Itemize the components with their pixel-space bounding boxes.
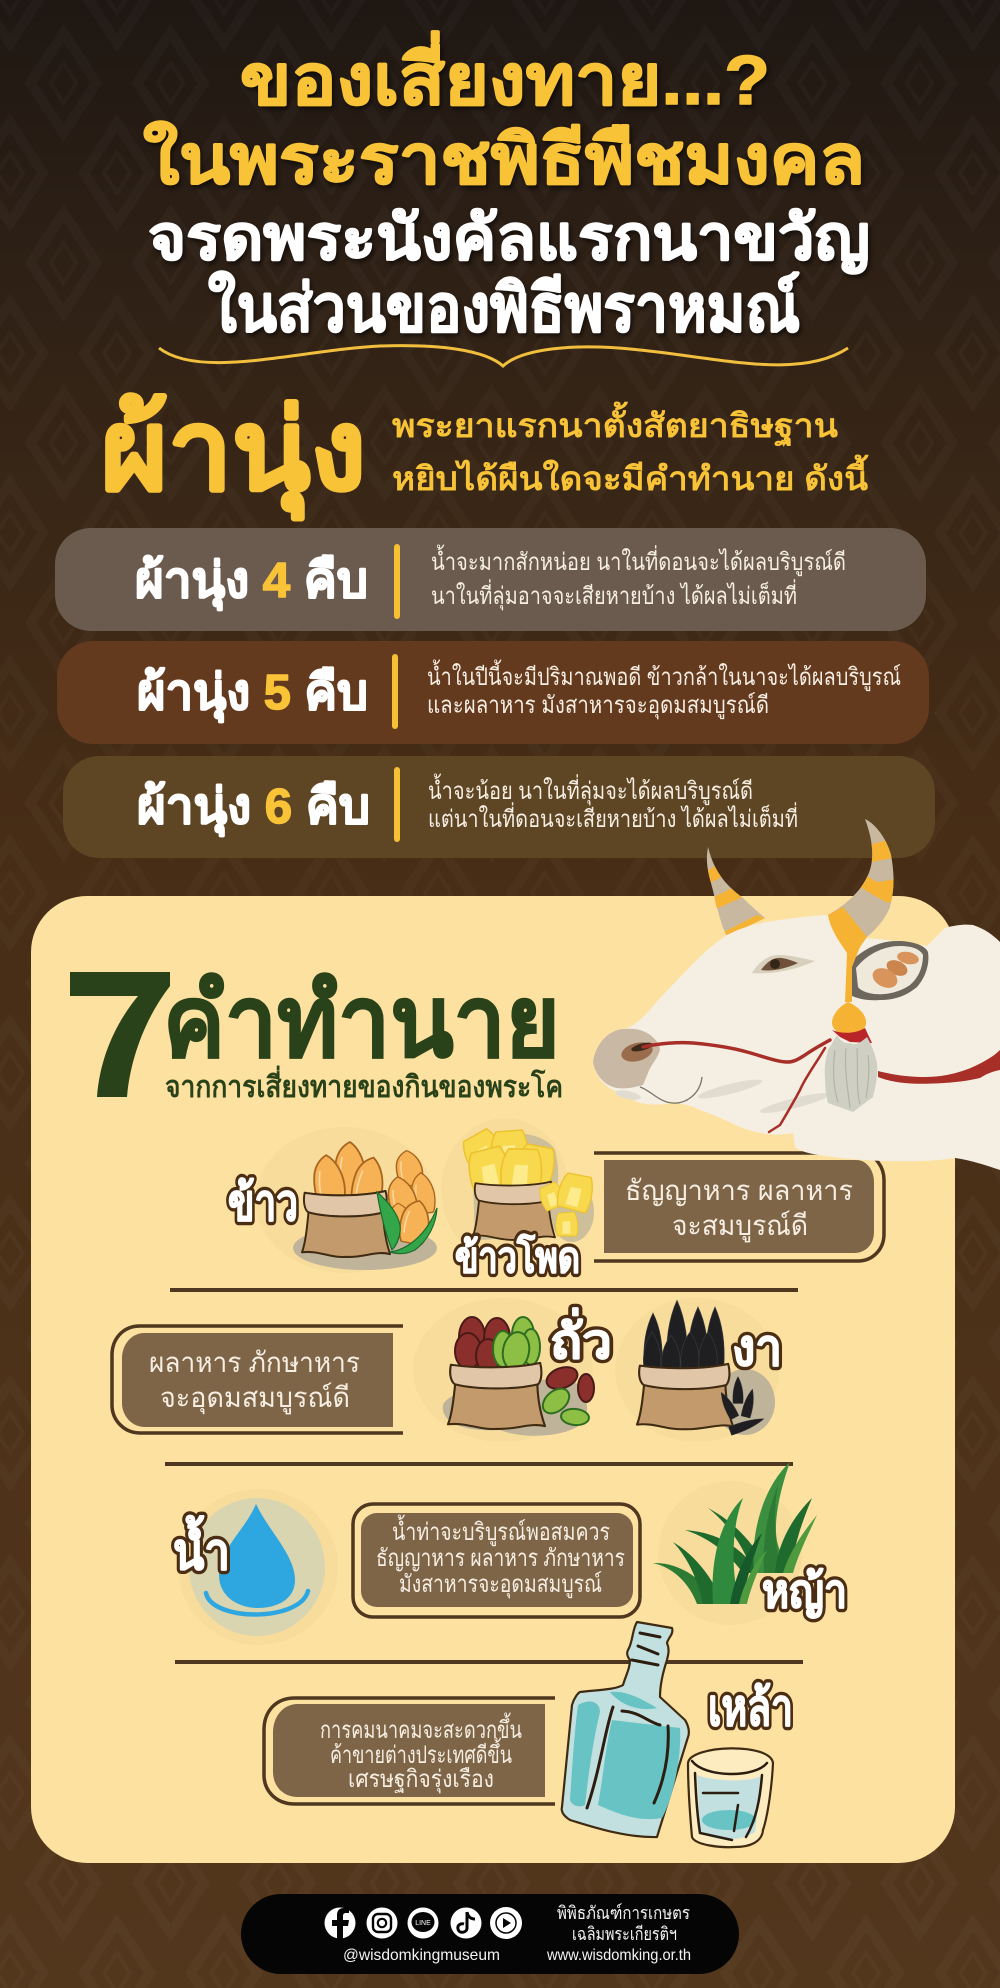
- museum name and website: www.wisdomking.or.th: [546, 1947, 691, 1964]
- muzzle: [593, 1029, 831, 1117]
- ear: [850, 941, 928, 1000]
- decorative flourish: [159, 346, 848, 366]
- callout: water: ธัญญาหาร ผลาหาร ภักษาหาร: [376, 1545, 625, 1572]
- icon: youtube: [490, 1907, 522, 1939]
- callout: fruit and food: ผลาหาร ภักษาหาร: [149, 1347, 360, 1378]
- label: grass: หญ้า: [762, 1565, 847, 1618]
- callout: grain and fruit: จะสมบูรณ์ดี: [672, 1210, 808, 1243]
- title: [143, 30, 870, 345]
- icon: tiktok: [450, 1908, 482, 1938]
- left horn: [706, 847, 765, 936]
- icon: sesame sack: [615, 1298, 779, 1442]
- ox head: [593, 915, 1000, 1170]
- callout: transport: การคมนาคมจะสะดวกขึ้น: [320, 1712, 522, 1744]
- callout: water: มังสาหารจะอุดมสมบูรณ์: [399, 1570, 602, 1599]
- panel: 4 khuep: นาในที่ลุ่มอาจจะเสียหายบ้าง ได้ผลไม่เต็มที่: [431, 579, 797, 611]
- title: ในส่วนของพิธีพราหมณ์: [208, 269, 800, 345]
- label: sesame: งา: [732, 1320, 782, 1376]
- divider lines: [165, 1288, 803, 1664]
- icon: water drop: [178, 1489, 338, 1645]
- callout: transport: เศรษฐกิจรุ่งเรือง: [348, 1766, 494, 1794]
- icon: corn sack: [441, 1118, 596, 1262]
- subheading: จากการเสี่ยงทายของกินของพระโค: [165, 1065, 563, 1104]
- museum name and website: [546, 1903, 691, 1964]
- panel: 4 khuep: ผ้านุ่ง 4 คืบ: [135, 554, 368, 611]
- panel: seven predictions: [31, 896, 955, 1863]
- intro text: พระยาแรกนาตั้งสัตยาธิษฐาน: [392, 401, 838, 447]
- panel: 4 khuep: [55, 528, 926, 631]
- icon: instagram: [366, 1908, 398, 1938]
- illustration: sacred ox: [593, 815, 1000, 1170]
- intro text: [392, 401, 869, 497]
- callout: fruit and food: [112, 1326, 403, 1433]
- callout: grain and fruit: [594, 1153, 884, 1261]
- label: beans: ถั่ว: [550, 1307, 612, 1369]
- callout: transport: ค้าขายต่างประเทศดีขึ้น: [330, 1737, 512, 1769]
- panel: 6 khuep: น้ำจะน้อย นาในที่ลุ่มจะได้ผลบริบูรณ์ดี: [428, 773, 753, 806]
- rope: neck strap: [878, 1050, 1000, 1084]
- callout: water: [353, 1504, 640, 1617]
- title: ของเสี่ยงทาย...?: [240, 30, 770, 119]
- heading: pha nung: ผ้านุ่ง: [101, 388, 366, 521]
- icon: beans sack: [413, 1298, 594, 1442]
- footer pill: [241, 1894, 739, 1974]
- label: sesame: งา: [732, 1320, 782, 1376]
- label: grass: หญ้า: [762, 1565, 847, 1618]
- callout: transport: [264, 1698, 555, 1804]
- icon: line: LINE: [415, 1920, 431, 1927]
- label: corn: ข้าวโพด: [455, 1233, 580, 1281]
- icon: grass: [653, 1462, 817, 1625]
- icon: rice sack: [255, 1127, 437, 1273]
- rope: [643, 1040, 830, 1132]
- head band: [828, 907, 867, 1002]
- right horn: [828, 819, 894, 937]
- panel: 6 khuep: แต่นาในที่ดอนจะเสียหายบ้าง ได้ผลไม่เต็มที่: [428, 802, 798, 833]
- panel: 5 khuep: และผลาหาร มังสาหารจะอุดมสมบูรณ์ดี: [427, 691, 769, 720]
- label: beans: ถั่ว: [550, 1307, 612, 1369]
- callout: grain and fruit: ธัญญาหาร ผลาหาร: [625, 1175, 853, 1206]
- eye: [752, 955, 815, 973]
- label: liquor: เหล้า: [708, 1680, 793, 1736]
- label: water: น้ำ: [173, 1515, 230, 1580]
- icon: line: [408, 1908, 438, 1938]
- intro text: หยิบได้ผืนใดจะมีคำทำนาย ดังนี้: [392, 454, 869, 497]
- label: liquor: เหล้า: [708, 1680, 793, 1736]
- tassel: [825, 1002, 877, 1112]
- panel: 6 khuep: [63, 756, 935, 858]
- callout: water: น้ำท่าจะบริบูรณ์พอสมควร: [392, 1514, 610, 1547]
- label: rice: ข้าว: [228, 1175, 298, 1231]
- panel: 4 khuep: น้ำจะมากสักหน่อย นาในที่ดอนจะได้ผลบริบูรณ์ดี: [431, 544, 846, 577]
- heading: predictions: คำทำนาย: [163, 966, 560, 1078]
- museum name and website: พิพิธภัณฑ์การเกษตร: [557, 1903, 690, 1923]
- title: จรดพระนังคัลแรกนาขวัญ: [148, 204, 870, 274]
- panel: 5 khuep: น้ำในปีนี้จะมีปริมาณพอดี ข้าวกล้าในนาจะได้ผลบริบูรณ์: [427, 659, 901, 692]
- panel: 5 khuep: [57, 641, 929, 744]
- title: ในพระราชพิธีพืชมงคล: [143, 120, 865, 198]
- heading number 7: [70, 972, 170, 1097]
- icon: glass: [688, 1748, 773, 1847]
- label: rice: ข้าว: [228, 1175, 298, 1231]
- label: corn: ข้าวโพด: [455, 1233, 580, 1281]
- panel: 6 khuep: ผ้านุ่ง 6 คืบ: [137, 780, 370, 837]
- icon: bottle: [562, 1622, 689, 1837]
- callout: fruit and food: จะอุดมสมบูรณ์ดี: [160, 1382, 350, 1415]
- icon: facebook: [324, 1908, 356, 1939]
- panel: 5 khuep: ผ้านุ่ง 5 คืบ: [137, 666, 368, 723]
- label: water: น้ำ: [173, 1515, 230, 1580]
- museum name and website: เฉลิมพระเกียรติฯ: [572, 1924, 677, 1944]
- social handle: @wisdomkingmuseum: [343, 1947, 500, 1964]
